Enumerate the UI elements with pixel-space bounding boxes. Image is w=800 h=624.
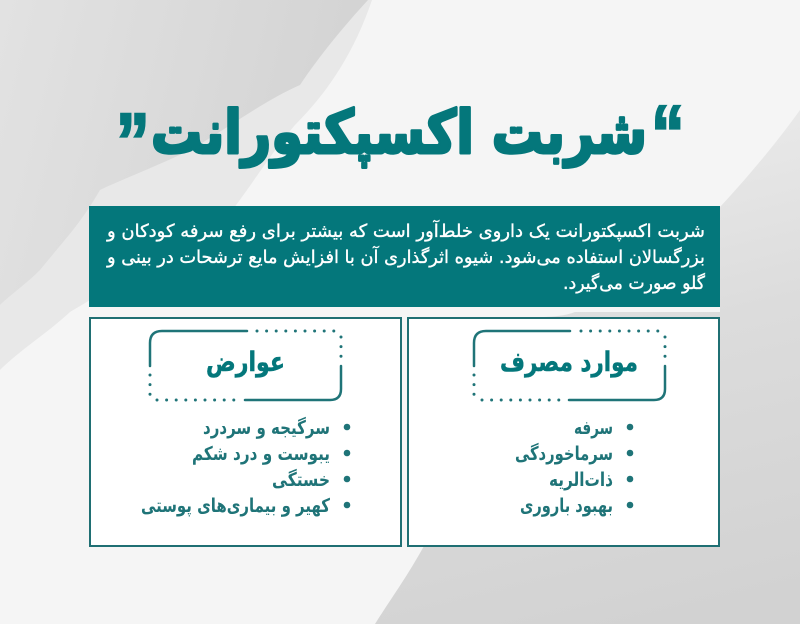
title words: شربت اکسپکتورانت	[151, 98, 647, 168]
list: uses: سرفه	[574, 417, 613, 439]
list: side effects: یبوست و درد شکم	[192, 443, 330, 465]
list: uses: بهبود باروری	[520, 495, 613, 517]
list: uses	[515, 417, 633, 517]
list: side effects: کهیر و بیماری‌های پوستی	[141, 495, 331, 517]
heading: side effects: عوارض	[206, 347, 285, 378]
list: uses: سرماخوردگی	[515, 442, 613, 465]
list: side effects: خستگی	[272, 468, 330, 491]
intro text: بزرگسالان استفاده می‌شود. شیوه اثرگذاری آن با افزایش مایع ترشحات در بینی و	[106, 245, 705, 268]
list: side effects	[141, 416, 350, 517]
heading: uses: موارد مصرف	[500, 347, 638, 378]
panel: side effects	[90, 318, 401, 546]
closing quote: ”	[116, 96, 150, 186]
title	[116, 88, 685, 186]
intro text: شربت اکسپکتورانت یک داروی خلط‌آور است که بیشتر برای رفع سرفه کودکان و	[106, 219, 705, 242]
list: uses: ذات‌الریه	[549, 469, 613, 491]
panel: uses	[408, 318, 719, 546]
opening quote: “	[651, 88, 685, 178]
intro panel	[89, 206, 720, 307]
list: side effects: سرگیجه و سردرد	[203, 416, 330, 439]
intro text: گلو صورت می‌گیرد.	[563, 272, 705, 294]
heading frame: uses	[474, 331, 665, 400]
heading frame: side effects	[150, 331, 341, 400]
intro text	[106, 219, 705, 294]
